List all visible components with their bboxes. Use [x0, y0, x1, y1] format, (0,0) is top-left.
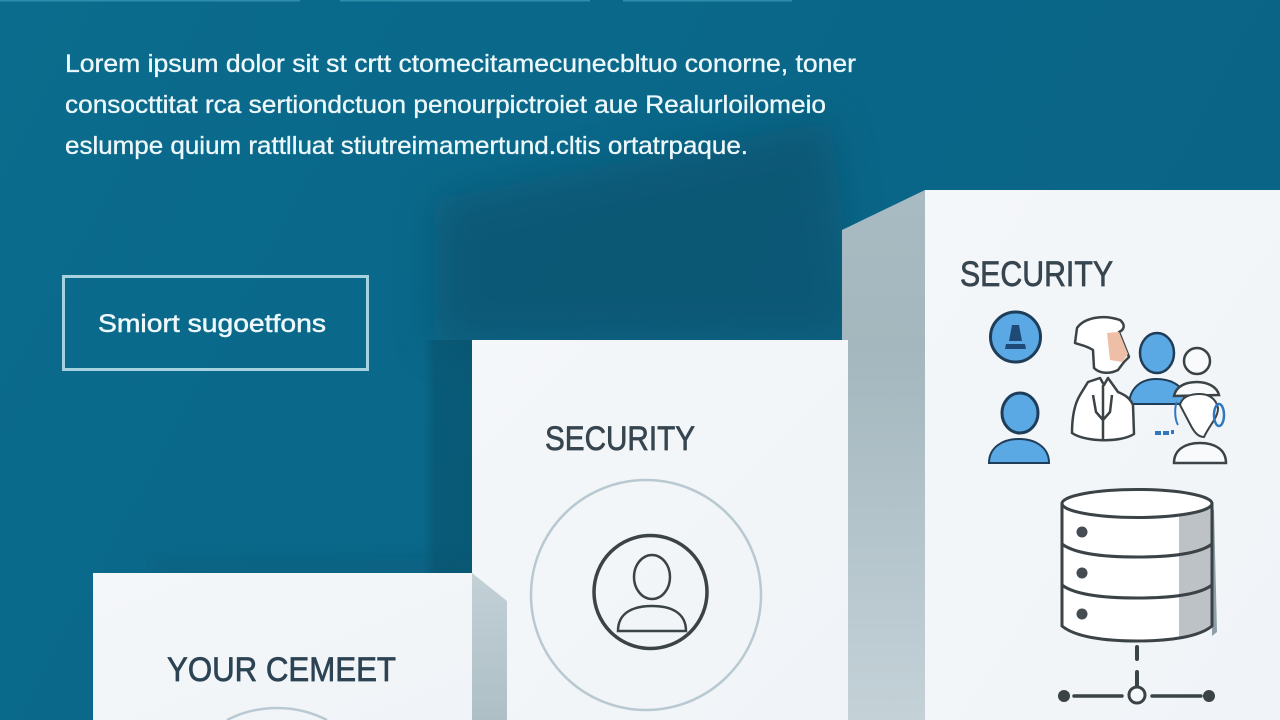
card side face [842, 190, 925, 720]
top edge strips [0, 0, 792, 2]
icon: person with headset [1155, 394, 1226, 463]
icon: network connector [1058, 647, 1215, 703]
icon: white person with hat [1174, 348, 1219, 396]
panel: left your cemeet card [93, 573, 507, 720]
intro paragraph: consocttitat rca sertiondctuon penourpictroiet aue Realurloilomeio [65, 91, 826, 119]
intro paragraph: Lorem ipsum dolor sit st crtt ctomecitamecunecbltuo conorne, toner [65, 50, 856, 78]
panel: right security card [842, 190, 1280, 720]
button: smart suggestions: Smiort sugoetfons [98, 310, 326, 338]
heading: security: SECURITY [545, 420, 695, 458]
icon: partial ring [227, 708, 327, 720]
panel: middle security card [472, 340, 848, 720]
intro paragraph: eslumpe quium rattlluat stiutreimamertund.cltis ortatrpaque. [65, 132, 748, 160]
icon: user in circle [594, 536, 707, 648]
icon: database [1062, 490, 1217, 641]
icon: outer ring [531, 480, 761, 710]
icon: blue person [989, 393, 1049, 463]
icon: blue person behind [1129, 333, 1184, 404]
button: smart suggestions [64, 276, 368, 370]
card front face [93, 573, 472, 720]
heading: your cemeet: YOUR CEMEET [167, 651, 396, 689]
icon: blue badge [990, 312, 1040, 362]
card side face [472, 573, 507, 720]
icon: white haired man [1072, 317, 1134, 441]
heading: security: SECURITY [960, 255, 1113, 294]
intro paragraph [65, 50, 856, 160]
drop shadows behind cards [150, 120, 860, 573]
card front face [925, 190, 1280, 720]
